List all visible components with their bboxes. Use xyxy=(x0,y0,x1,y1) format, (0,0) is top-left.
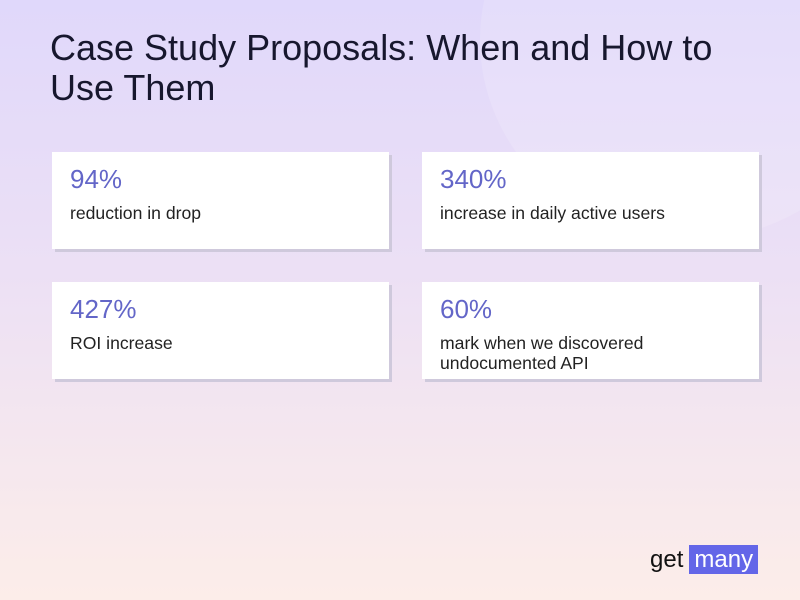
card: 340%: 340% xyxy=(440,164,506,194)
logo: get xyxy=(650,546,683,573)
logo xyxy=(650,545,758,574)
card: 94%: reduction in drop xyxy=(70,203,201,223)
card: 427%: 427% xyxy=(70,294,136,324)
card: 427% xyxy=(52,282,389,379)
card: 60%: mark when we discovered xyxy=(440,333,643,353)
card: 340% xyxy=(422,152,759,249)
card: 340%: increase in daily active users xyxy=(440,203,665,223)
card: 60%: 60% xyxy=(440,294,492,324)
logo: many xyxy=(694,546,753,573)
title: Case Study Proposals: When and How to Use Them xyxy=(50,27,712,108)
card: 60% xyxy=(422,282,759,379)
card: 94%: 94% xyxy=(70,164,122,194)
card: 427%: ROI increase xyxy=(70,333,173,353)
card: 60%: undocumented API xyxy=(440,353,589,373)
card: 94% xyxy=(52,152,389,249)
